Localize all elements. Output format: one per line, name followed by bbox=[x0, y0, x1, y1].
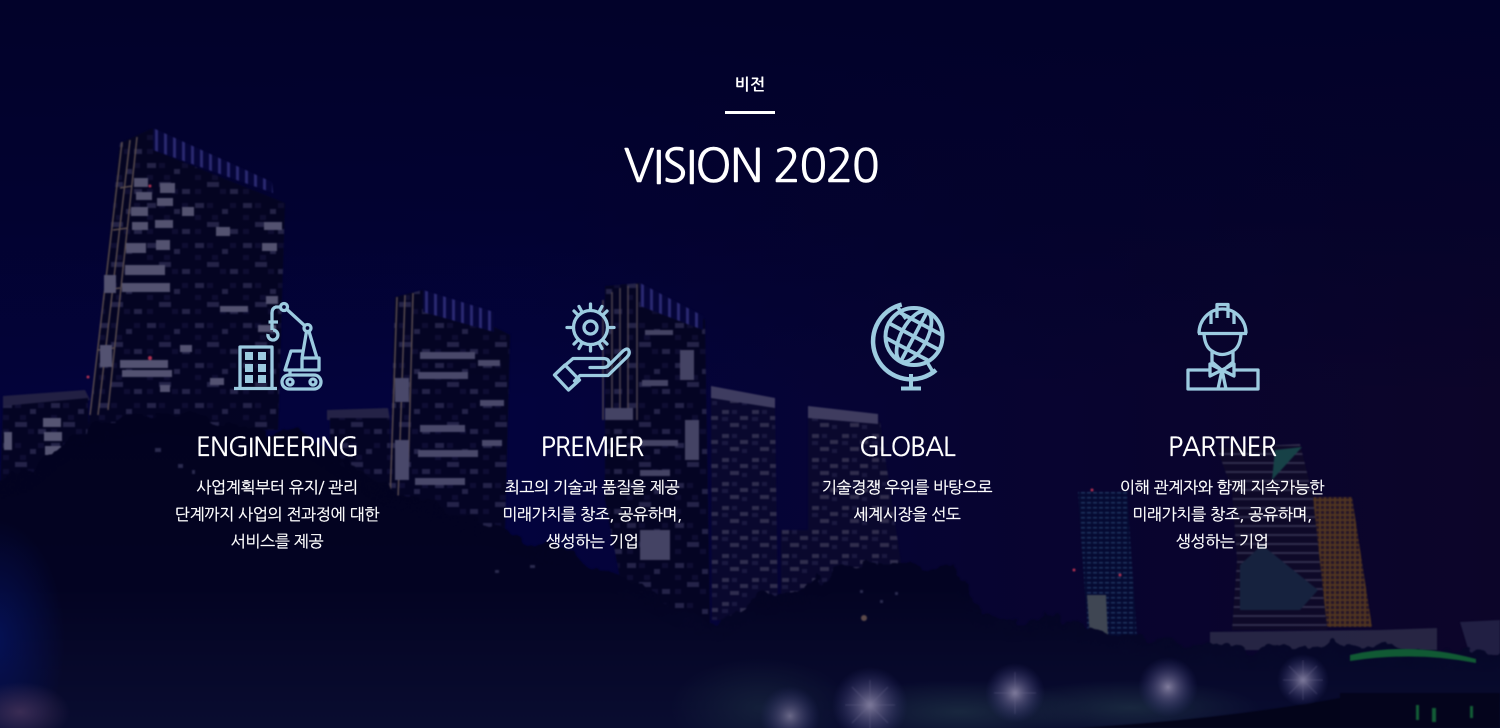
column: PARTNER bbox=[1120, 434, 1324, 550]
description bbox=[822, 480, 992, 523]
description: 최고의 기술과 품질을 제공 bbox=[505, 480, 679, 496]
tower 3 bbox=[605, 283, 710, 630]
description: 사업계획부터 유지/ 관리 bbox=[196, 480, 358, 496]
trees bbox=[0, 412, 1500, 728]
left low buildings bbox=[3, 390, 90, 408]
column: ENGINEERING bbox=[175, 434, 380, 550]
description: 세계시장을 선도 bbox=[853, 507, 961, 523]
name: GLOBAL bbox=[859, 434, 955, 460]
description: 서비스를 제공 bbox=[231, 534, 323, 550]
name: PREMIER bbox=[541, 434, 643, 460]
description: 미래가치를 창조, 공유하며, bbox=[502, 507, 682, 523]
name: PARTNER bbox=[1168, 434, 1276, 460]
tower 5 bbox=[808, 416, 905, 590]
street lights bbox=[760, 654, 1329, 728]
icon: building and crane bbox=[234, 302, 323, 391]
right buildings bbox=[1078, 492, 1137, 638]
description: 단계까지 사업의 전과정에 대한 bbox=[175, 507, 379, 523]
description bbox=[175, 480, 380, 550]
description bbox=[1120, 480, 1324, 550]
title: VISION 2020 bbox=[624, 143, 878, 189]
description: 생성하는 기업 bbox=[1176, 534, 1268, 550]
name: ENGINEERING bbox=[196, 434, 358, 460]
icon: worker with helmet bbox=[1186, 302, 1260, 391]
soft ground light bbox=[0, 520, 1260, 728]
description: 이해 관계자와 함께 지속가능한 bbox=[1120, 480, 1324, 496]
description: 미래가치를 창조, 공유하며, bbox=[1132, 507, 1312, 523]
description bbox=[502, 480, 682, 550]
heading underline bbox=[725, 111, 775, 114]
icon: hand holding gear bbox=[552, 302, 631, 392]
tower 2 bbox=[388, 290, 510, 530]
tower 1 bbox=[88, 128, 285, 430]
column: PREMIER bbox=[502, 434, 682, 550]
description: 생성하는 기업 bbox=[546, 534, 638, 550]
column: GLOBAL bbox=[822, 434, 992, 523]
icon: globe bbox=[870, 302, 944, 390]
heading label: 비전 bbox=[735, 78, 765, 93]
description: 기술경쟁 우위를 바탕으로 bbox=[822, 480, 992, 496]
tower 4 bbox=[711, 392, 778, 620]
